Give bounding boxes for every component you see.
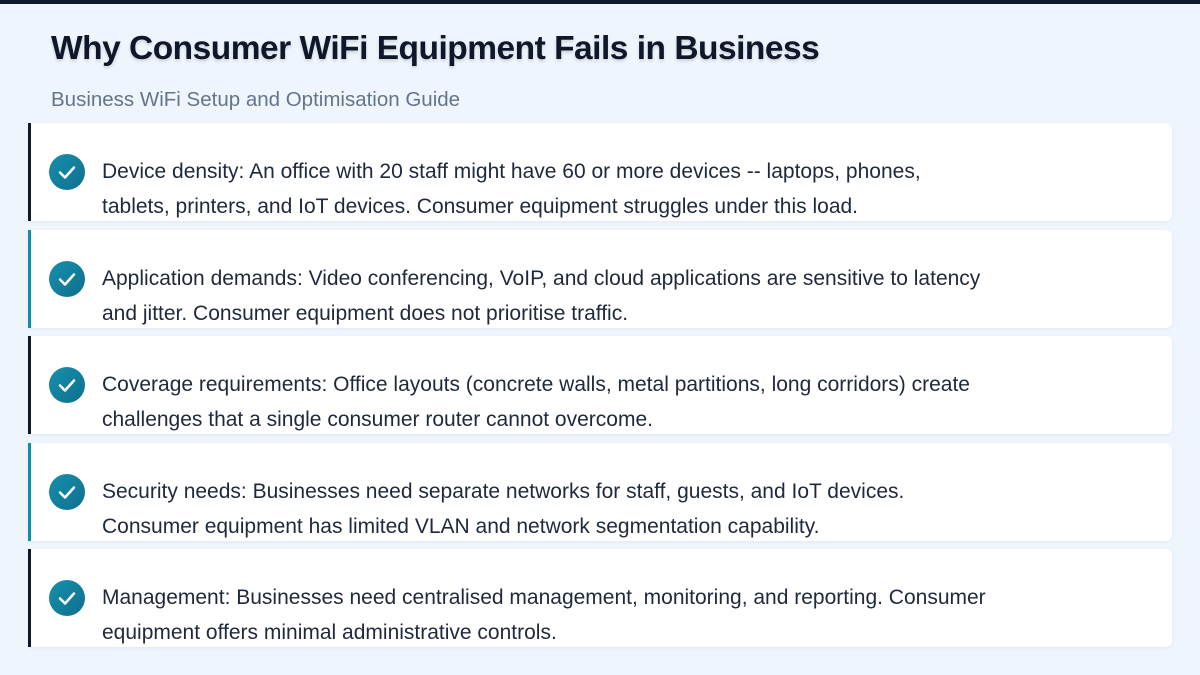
text: Security needs: Businesses need separate networks for staff, guests, and IoT devices. <box>102 480 904 503</box>
text: equipment offers minimal administrative controls. <box>102 621 557 644</box>
text: tablets, printers, and IoT devices. Consumer equipment struggles under this load. <box>102 195 858 218</box>
text: Application demands: Video conferencing, VoIP, and cloud applications are sensitive to latency <box>102 267 980 290</box>
card: security <box>28 443 1172 541</box>
card: management <box>28 549 1172 647</box>
card: device density <box>28 123 1172 221</box>
card: application demands <box>28 230 1172 328</box>
icon: check <box>49 261 85 297</box>
icon: check <box>49 474 85 510</box>
text: and jitter. Consumer equipment does not prioritise traffic. <box>102 302 628 325</box>
text <box>102 267 980 325</box>
text: Management: Businesses need centralised management, monitoring, and reporting. Consumer <box>102 586 986 609</box>
text <box>102 480 904 538</box>
text: challenges that a single consumer router cannot overcome. <box>102 408 653 431</box>
subtitle: Business WiFi Setup and Optimisation Guide <box>51 88 460 111</box>
title: Why Consumer WiFi Equipment Fails in Business <box>51 30 819 67</box>
icon: check <box>49 367 85 403</box>
icon: check <box>49 580 85 616</box>
icon: check <box>49 154 85 190</box>
text <box>102 586 986 644</box>
text <box>102 373 970 431</box>
text: Consumer equipment has limited VLAN and network segmentation capability. <box>102 515 820 538</box>
text <box>102 160 921 218</box>
text: Device density: An office with 20 staff might have 60 or more devices -- laptops, phones, <box>102 160 921 183</box>
card: coverage <box>28 336 1172 434</box>
text: Coverage requirements: Office layouts (concrete walls, metal partitions, long corridors) create <box>102 373 970 396</box>
